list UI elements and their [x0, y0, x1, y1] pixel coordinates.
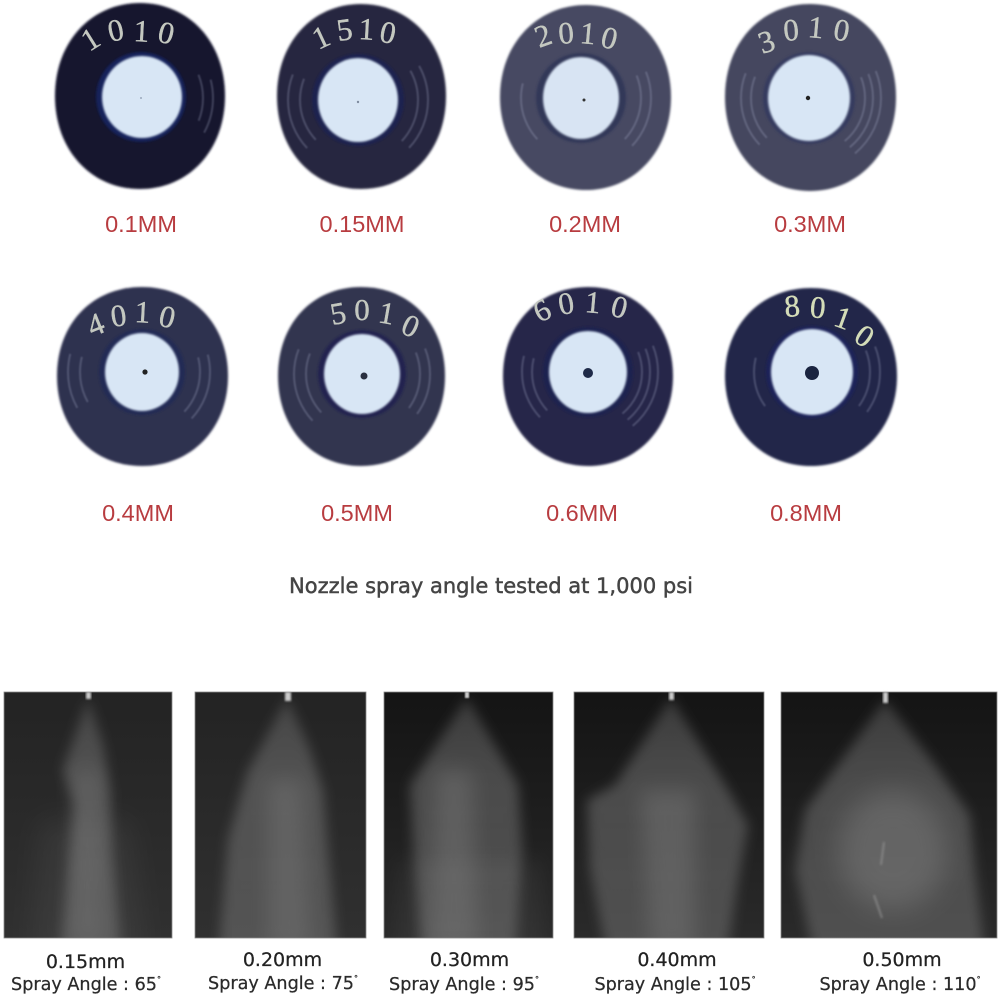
nozzle disc 1010: [55, 3, 225, 189]
nozzle disc 1010: 1010: [74, 11, 178, 58]
nozzle disc 5010: [278, 287, 445, 466]
label 0.2MM: 0.2MM: [549, 211, 621, 237]
caption 0.15mm: Spray Angle : 65: [11, 975, 157, 995]
spray panel 0.40mm: [574, 692, 764, 960]
label 0.1MM: 0.1MM: [105, 211, 177, 237]
nozzle disc 8010: 8010: [783, 288, 881, 355]
caption 0.50mm: °: [977, 975, 981, 984]
label 0.8MM: 0.8MM: [770, 500, 842, 526]
spray photos: [4, 692, 997, 960]
spray captions: [11, 949, 981, 995]
nozzle disc 1510: [277, 4, 446, 189]
caption 0.40mm: Spray Angle : 105: [594, 975, 752, 995]
nozzle disc 8010: [725, 288, 897, 466]
spray panel 0.20mm: [195, 692, 366, 960]
caption 0.20mm: 0.20mm: [243, 949, 322, 971]
nozzle disc 6010: 6010: [527, 284, 631, 329]
label 0.4MM: 0.4MM: [102, 500, 174, 526]
nozzle disc 4010: [57, 287, 228, 466]
nozzle disc 6010: [503, 284, 673, 466]
label 0.3MM: 0.3MM: [774, 211, 846, 237]
caption 0.30mm: °: [535, 975, 539, 984]
spray panel 0.30mm: [384, 692, 553, 960]
label 0.5MM: 0.5MM: [321, 500, 393, 526]
caption 0.40mm: 0.40mm: [637, 949, 717, 971]
nozzle disc 4010: 4010: [82, 294, 179, 343]
caption 0.20mm: [208, 949, 358, 994]
caption 0.50mm: Spray Angle : 110: [819, 975, 977, 995]
caption: Nozzle spray angle tested at 1,000 psi: [289, 574, 693, 598]
nozzle disc 1510: 1510: [306, 11, 399, 56]
label 0.6MM: 0.6MM: [546, 500, 618, 526]
caption 0.40mm: [594, 949, 756, 995]
nozzle disc 2010: 2010: [530, 15, 621, 57]
nozzle disc 3010: 3010: [754, 9, 852, 61]
nozzle disc 3010: [725, 4, 896, 191]
caption 0.30mm: 0.30mm: [430, 949, 509, 971]
caption 0.20mm: °: [354, 974, 358, 983]
caption 0.50mm: 0.50mm: [862, 949, 942, 971]
caption 0.20mm: Spray Angle : 75: [208, 974, 354, 994]
nozzle disc 2010: [500, 5, 671, 190]
caption 0.15mm: 0.15mm: [46, 951, 125, 973]
caption 0.15mm: [11, 951, 161, 995]
caption 0.15mm: °: [157, 975, 161, 984]
caption 0.30mm: [389, 949, 539, 995]
spray panel 0.15mm: [4, 692, 172, 960]
spray panel 0.50mm: [781, 692, 997, 960]
nozzle grid: [55, 3, 897, 466]
size labels: [102, 211, 846, 526]
caption 0.30mm: Spray Angle : 95: [389, 975, 535, 995]
caption 0.40mm: °: [752, 975, 756, 984]
label 0.15MM: 0.15MM: [320, 211, 404, 237]
caption 0.50mm: [819, 949, 981, 995]
nozzle disc 5010: 5010: [327, 292, 425, 345]
